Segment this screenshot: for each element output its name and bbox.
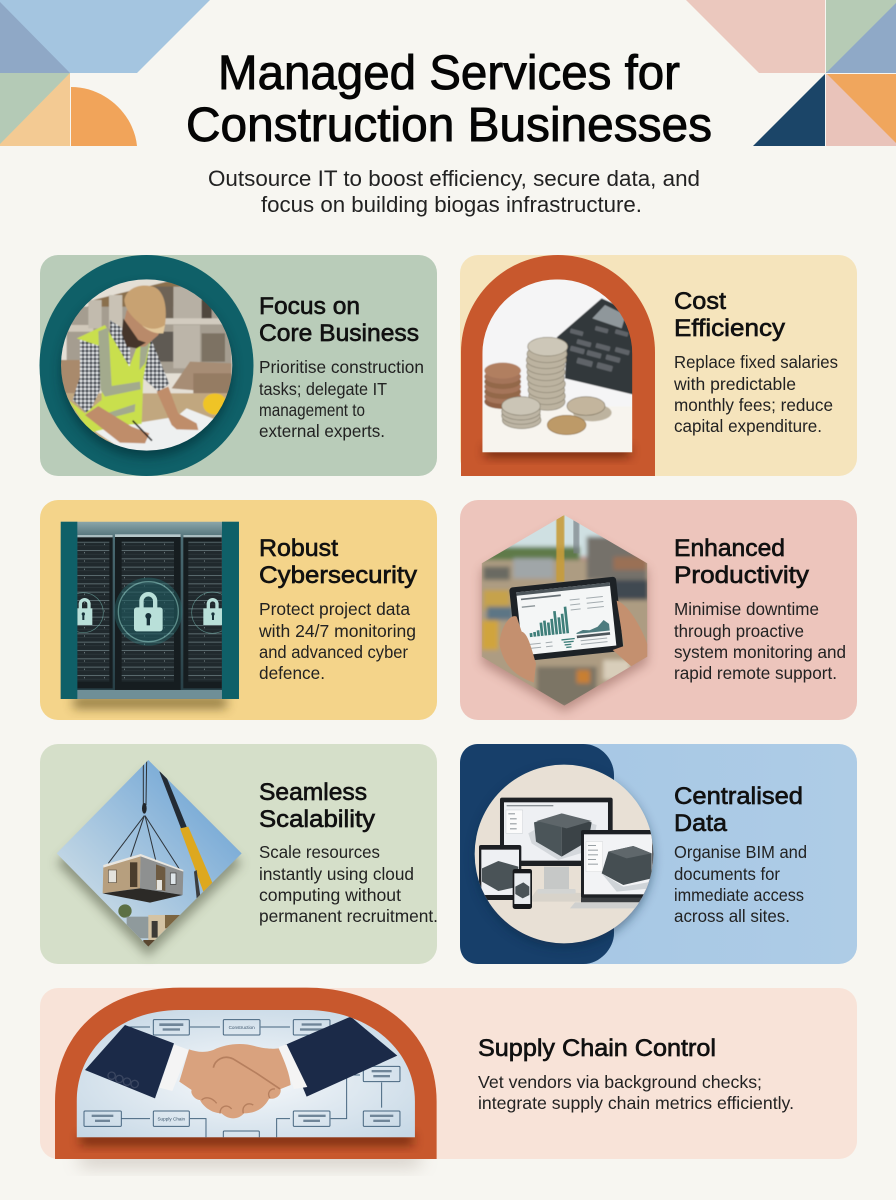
panel: centralised data bbox=[460, 744, 857, 964]
text: seamless scalability description: Scale resources bbox=[259, 842, 380, 862]
text: seamless scalability description bbox=[259, 842, 438, 926]
text: robust cybersecurity description: Protect project data bbox=[259, 599, 410, 619]
heading: seamless scalability: Seamless bbox=[259, 779, 367, 806]
text: enhanced productivity description: through proactive bbox=[674, 621, 804, 641]
text: enhanced productivity description: rapid remote support. bbox=[674, 663, 837, 683]
panel: robust cybersecurity bbox=[40, 500, 437, 720]
text: cost efficiency description bbox=[673, 352, 838, 436]
text: focus on core business description: tasks; delegate IT bbox=[259, 379, 387, 399]
text: robust cybersecurity description: defence. bbox=[259, 663, 325, 683]
heading: centralised data: Data bbox=[674, 810, 728, 837]
text: robust cybersecurity description: and advanced cyber bbox=[259, 642, 408, 662]
heading: robust cybersecurity: Robust bbox=[259, 535, 338, 562]
text: enhanced productivity description: system monitoring and bbox=[674, 642, 846, 662]
title bbox=[186, 47, 712, 152]
heading: robust cybersecurity bbox=[259, 535, 417, 589]
heading: cost efficiency: Efficiency bbox=[674, 315, 785, 342]
text: focus on core business description: external experts. bbox=[259, 421, 385, 441]
text: robust cybersecurity description: with 24/7 monitoring bbox=[258, 621, 416, 641]
text: focus on core business description: management to bbox=[259, 400, 365, 420]
title: Construction Businesses bbox=[186, 99, 712, 152]
photo: worker reviewing plans in teal ring bbox=[40, 255, 254, 476]
text: enhanced productivity description: Minimise downtime bbox=[674, 599, 819, 619]
photo: handshake over supply chain flowchart in arch bbox=[55, 988, 437, 1159]
text: centralised data description: immediate access bbox=[674, 885, 804, 905]
heading: focus on core business: Core Business bbox=[259, 320, 419, 347]
panel: supply chain control bbox=[40, 988, 857, 1166]
text: supply chain control description: integrate supply chain metrics efficiently. bbox=[478, 1093, 794, 1113]
text: centralised data description: documents for bbox=[674, 864, 780, 884]
text: focus on core business description bbox=[259, 357, 424, 441]
text: seamless scalability description: permanent recruitment. bbox=[259, 906, 438, 926]
photo: handshake over supply chain flowchart in arch: Construction bbox=[229, 1025, 255, 1030]
heading: seamless scalability bbox=[259, 779, 375, 833]
heading: robust cybersecurity: Cybersecurity bbox=[259, 562, 417, 589]
text: supply chain control description: Vet vendors via background checks; bbox=[478, 1072, 762, 1092]
heading: seamless scalability: Scalability bbox=[259, 806, 375, 833]
text: supply chain control description bbox=[478, 1072, 794, 1113]
panel: focus on core business bbox=[40, 255, 437, 476]
photo: crane lifting module in diamond bbox=[57, 760, 242, 957]
text: cost efficiency description: capital expenditure. bbox=[674, 416, 822, 436]
text: cost efficiency description: monthly fees; reduce bbox=[674, 395, 833, 415]
text: robust cybersecurity description bbox=[258, 599, 416, 683]
photo: server racks with padlocks bbox=[61, 522, 239, 708]
title: Managed Services for bbox=[218, 47, 680, 100]
decoration: top right geometric shapes bbox=[686, 0, 896, 146]
heading: supply chain control: Supply Chain Control bbox=[478, 1035, 716, 1062]
heading: focus on core business: Focus on bbox=[259, 293, 360, 320]
panel: enhanced productivity bbox=[460, 500, 857, 720]
photo: coins and calculator in arch bbox=[461, 255, 655, 476]
text: centralised data description: Organise BIM and bbox=[674, 842, 807, 862]
text: seamless scalability description: instantly using cloud bbox=[259, 864, 414, 884]
text: cost efficiency description: with predictable bbox=[673, 374, 796, 394]
photo: tablet dashboard in hexagon bbox=[480, 513, 650, 712]
heading: enhanced productivity: Enhanced bbox=[674, 535, 785, 562]
decoration: top left geometric shapes bbox=[0, 0, 210, 146]
panel: cost efficiency bbox=[460, 255, 857, 476]
heading: focus on core business bbox=[259, 293, 419, 347]
heading: centralised data bbox=[674, 783, 803, 837]
text: seamless scalability description: computing without bbox=[259, 885, 401, 905]
heading: enhanced productivity bbox=[674, 535, 809, 589]
text: enhanced productivity description bbox=[674, 599, 846, 683]
text: cost efficiency description: Replace fixed salaries bbox=[674, 352, 838, 372]
heading: cost efficiency bbox=[674, 288, 785, 342]
photo: BIM model on devices in circle bbox=[460, 744, 654, 964]
panel: seamless scalability bbox=[40, 744, 438, 964]
subtitle: Outsource IT to boost efficiency, secure data, and bbox=[208, 166, 700, 191]
heading: enhanced productivity: Productivity bbox=[674, 562, 809, 589]
subtitle bbox=[208, 166, 700, 217]
heading: centralised data: Centralised bbox=[674, 783, 803, 810]
text: focus on core business description: Prioritise construction bbox=[259, 357, 424, 377]
text: centralised data description: across all sites. bbox=[674, 906, 790, 926]
photo: handshake over supply chain flowchart in arch: Supply Chain bbox=[157, 1116, 186, 1121]
subtitle: focus on building biogas infrastructure. bbox=[261, 192, 642, 217]
heading: cost efficiency: Cost bbox=[674, 288, 726, 315]
text: centralised data description bbox=[674, 842, 807, 926]
